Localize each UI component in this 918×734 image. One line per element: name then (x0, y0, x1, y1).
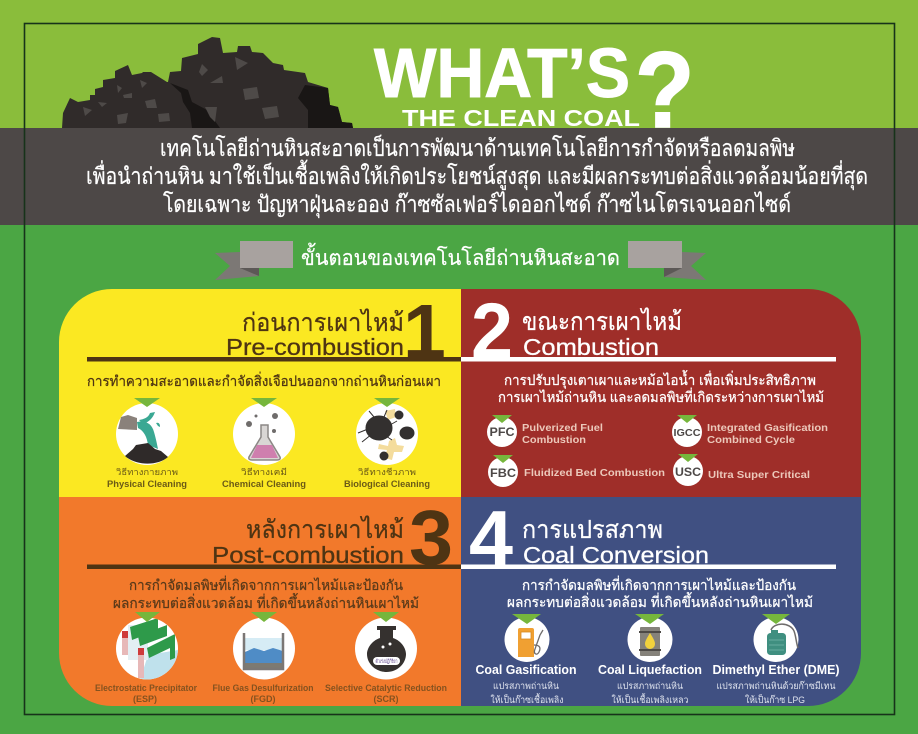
label: coal liquefaction: ให้เป็นเชื้อเพลิงเหลว (612, 693, 688, 706)
label: SCR: Selective Catalytic Reduction (325, 683, 447, 693)
label: PFC: Pulverized Fuel (522, 423, 603, 434)
label: chemical cleaning: วิธีทางเคมี (241, 467, 287, 477)
description: การปรับปรุงเตาเผาและหม้อไอน้ำ เพื่อเพิ่มประสิทธิภาพ (504, 370, 816, 389)
number 1: 1 (403, 289, 446, 375)
description: การกำจัดมลพิษที่เกิดจากการเผาไหม้และป้องกัน (129, 576, 403, 593)
label: ESP: Electrostatic Precipitator (95, 683, 197, 693)
description (113, 576, 419, 611)
label: ESP: (ESP) (133, 694, 157, 704)
label: SCR (325, 683, 447, 704)
label: chemical cleaning (222, 467, 306, 489)
title: THE CLEAN COAL: THE CLEAN COAL (402, 105, 640, 131)
label: FGD (212, 683, 314, 704)
icon: biological cleaning (356, 398, 418, 465)
label: biological cleaning: วิธีทางชีวภาพ (358, 467, 416, 477)
label: ESP (95, 683, 197, 704)
label: PFC: Combustion (522, 435, 586, 446)
number 2: 2 (471, 286, 513, 375)
description (507, 576, 813, 610)
label: biological cleaning (344, 467, 430, 489)
description (498, 370, 824, 405)
panels (59, 289, 861, 706)
label: coal liquefaction: แปรสภาพถ่านหิน (617, 681, 683, 692)
label: coal gasification (476, 663, 576, 706)
label: FBC: Fluidized Bed Combustion (524, 468, 665, 479)
label: dimethyl ether: ให้เป็นก๊าซ LPG (745, 693, 805, 706)
badge: USC (673, 454, 703, 486)
label: IGCC: Integrated Gasification (707, 423, 828, 434)
label: coal liquefaction: Coal Liquefaction (598, 663, 702, 677)
heading english: Post-combustion (212, 542, 404, 568)
panel 3 content (87, 495, 461, 704)
label: physical cleaning (107, 467, 187, 489)
intro text line 3: โดยเฉพาะ ปัญหาฝุ่นละออง ก๊าซซัลเฟอร์ไดออกไซด์ ก๊าซไนโตรเจนออกไซด์ (163, 191, 791, 218)
icon: dimethyl ether (754, 614, 798, 662)
heading english: Combustion (523, 334, 659, 360)
badge: IGCC (672, 415, 702, 447)
title: question mark: ? (635, 29, 694, 150)
badge: USC: USC (675, 465, 701, 479)
label: physical cleaning: วิธีทางกายภาพ (116, 467, 178, 477)
badge: PFC: PFC (490, 427, 514, 439)
intro band (0, 128, 918, 225)
icon: chemical cleaning (233, 398, 295, 465)
badge: IGCC: IGCC (674, 427, 701, 439)
icon: coal liquefaction (628, 614, 672, 662)
heading english: Coal Conversion (523, 542, 709, 568)
label: USC: Ultra Super Critical (708, 470, 810, 481)
label: chemical cleaning: Chemical Cleaning (222, 479, 306, 489)
number 4: 4 (469, 494, 513, 582)
background: lower green (0, 224, 918, 734)
heading thai: หลังการเผาไหม้ (246, 515, 404, 544)
heading thai: ขณะการเผาไหม้ (522, 307, 682, 336)
label: coal gasification: แปรสภาพถ่านหิน (493, 681, 559, 692)
panel 4 content (461, 494, 840, 706)
panel: post-combustion background (59, 497, 461, 706)
heading thai: การแปรสภาพ (522, 516, 663, 544)
description: ผลกระทบต่อสิ่งแวดล้อม ที่เกิดขึ้นหลังถ่านหินเผาไหม้ (507, 592, 813, 610)
badge: PFC (487, 415, 517, 447)
badge: FBC: FBC (490, 466, 516, 480)
description: การเผาไหม้ถ่านหิน และลดมลพิษที่เกิดระหว่างการเผาไหม้ (498, 388, 824, 405)
title: WHAT'S: WHAT’S (374, 34, 630, 112)
label: FGD: Flue Gas Desulfurization (212, 683, 314, 693)
label: IGCC: Combined Cycle (707, 435, 795, 446)
heading english: Pre-combustion (226, 334, 404, 360)
label: dimethyl ether: แปรสภาพถ่านหินด้วยก๊าซมีเทน (716, 680, 836, 692)
label: coal gasification: Coal Gasification (476, 663, 576, 677)
description: การกำจัดมลพิษที่เกิดจากการเผาไหม้และป้องกัน (522, 576, 796, 593)
label: biological cleaning: Biological Cleaning (344, 479, 430, 489)
number 3: 3 (409, 495, 453, 581)
icon: SCR (355, 612, 417, 680)
panel: pre-combustion background (59, 289, 461, 497)
icon: physical cleaning (116, 398, 178, 465)
icon: SCR: ตัวเร่งปฏิกิริยา (376, 658, 398, 665)
label: SCR: (SCR) (374, 694, 398, 704)
intro text line 1: เทคโนโลยีถ่านหินสะอาดเป็นการพัฒนาด้านเทคโนโลยีการกำจัดหรือลดมลพิษ (160, 133, 795, 161)
label: physical cleaning: Physical Cleaning (107, 479, 187, 489)
panel 2 content (461, 286, 836, 487)
label: coal gasification: ให้เป็นก๊าซเชื้อเพลิง (490, 693, 564, 706)
label: PFC (522, 423, 603, 446)
ribbon: left (215, 241, 293, 280)
label: dimethyl ether: Dimethyl Ether (DME) (712, 663, 840, 677)
label: dimethyl ether (712, 663, 840, 706)
panel: coal conversion background (461, 497, 861, 706)
label: IGCC (707, 423, 828, 446)
panel: combustion background (461, 289, 861, 497)
panel 1 content (87, 289, 461, 489)
ribbon heading: ขั้นตอนของเทคโนโลยีถ่านหินสะอาด (301, 243, 620, 270)
icon: ESP (116, 612, 178, 680)
badge: FBC (488, 455, 518, 487)
label: coal liquefaction (598, 663, 702, 706)
icon: coal gasification (504, 614, 550, 662)
description: การทำความสะอาดและกำจัดสิ่งเจือปนออกจากถ่านหินก่อนเผา (87, 372, 441, 389)
ribbon: right (628, 241, 706, 280)
icon: FGD (233, 612, 295, 680)
background: top light green (0, 0, 918, 129)
icon: coal pile (62, 37, 353, 128)
description: ผลกระทบต่อสิ่งแวดล้อม ที่เกิดขึ้นหลังถ่านหินเผาไหม้ (113, 593, 419, 611)
label: FGD: (FGD) (250, 694, 276, 704)
heading thai: ก่อนการเผาไหม้ (242, 308, 404, 337)
